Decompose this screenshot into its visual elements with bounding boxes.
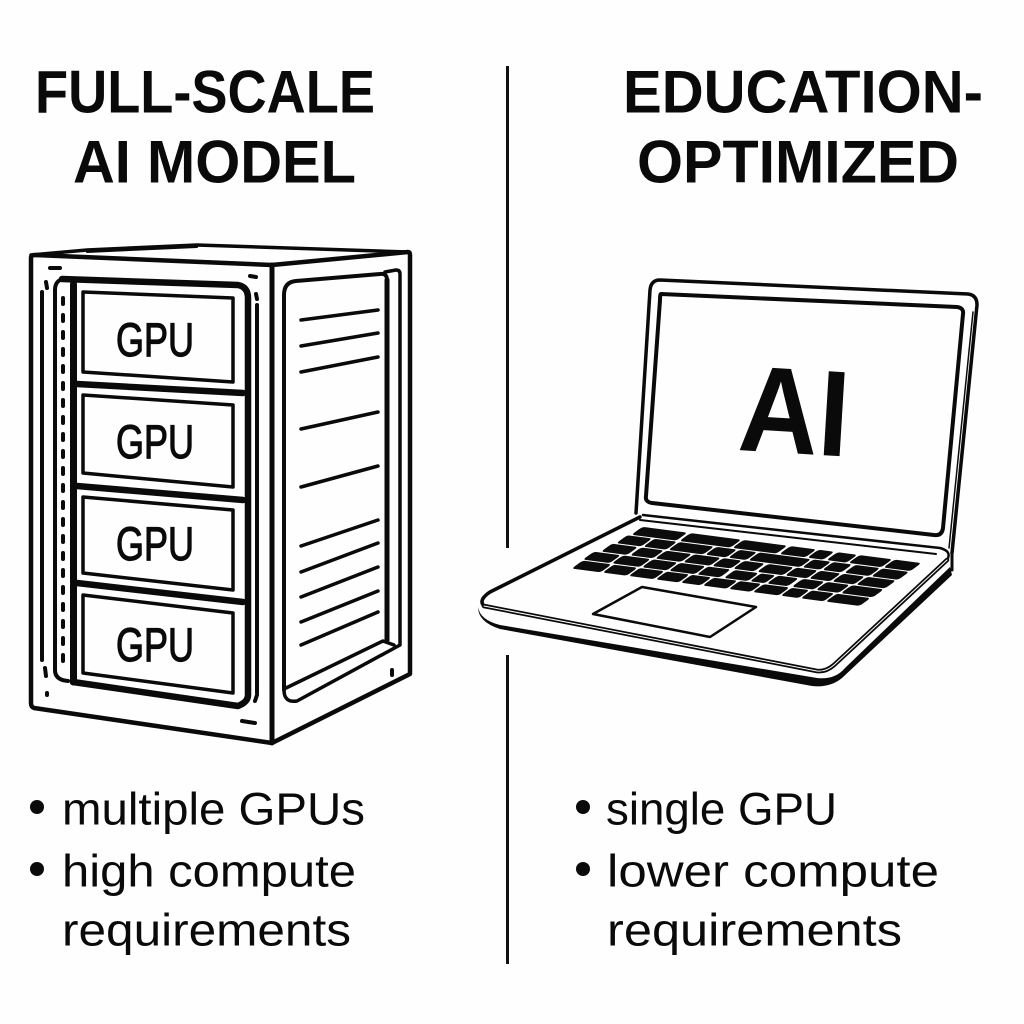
right bullet list: single GPU (606, 784, 837, 834)
right title: OPTIMIZED (637, 128, 959, 196)
laptop base (482, 517, 640, 606)
GPU module 2: GPU (116, 415, 194, 468)
GPU module 2 (83, 395, 233, 487)
left bullet list: requirements (62, 904, 351, 956)
GPU module 1 (83, 292, 233, 382)
chassis frame around GPU bays (55, 279, 68, 681)
GPU module 3 (83, 497, 233, 590)
right bullet list (576, 784, 939, 956)
icon: server rack (31, 245, 410, 743)
laptop screen bezel (646, 294, 963, 535)
left bullet list (30, 784, 365, 956)
GPU module 3: GPU (116, 517, 194, 570)
icon: laptop (478, 280, 977, 686)
laptop screen label: AI (735, 339, 854, 483)
left title (35, 58, 375, 196)
side panel vent lines (301, 310, 378, 645)
right title: EDUCATION- (623, 58, 983, 126)
right bullet list: requirements (607, 904, 902, 956)
center divider (506, 66, 509, 964)
left title: FULL-SCALE (35, 58, 375, 126)
right title (623, 58, 983, 196)
left title: AI MODEL (73, 128, 356, 196)
left bullet list: high compute (62, 846, 356, 896)
GPU module 4 (83, 595, 233, 693)
left bullet list: multiple GPUs (62, 784, 365, 834)
GPU module 4: GPU (116, 618, 194, 671)
side panel (284, 270, 400, 701)
laptop lid (636, 280, 977, 553)
laptop touchpad (593, 587, 756, 637)
right bullet list: lower compute (607, 846, 939, 896)
GPU module 1: GPU (116, 313, 194, 366)
laptop keyboard (571, 525, 921, 606)
